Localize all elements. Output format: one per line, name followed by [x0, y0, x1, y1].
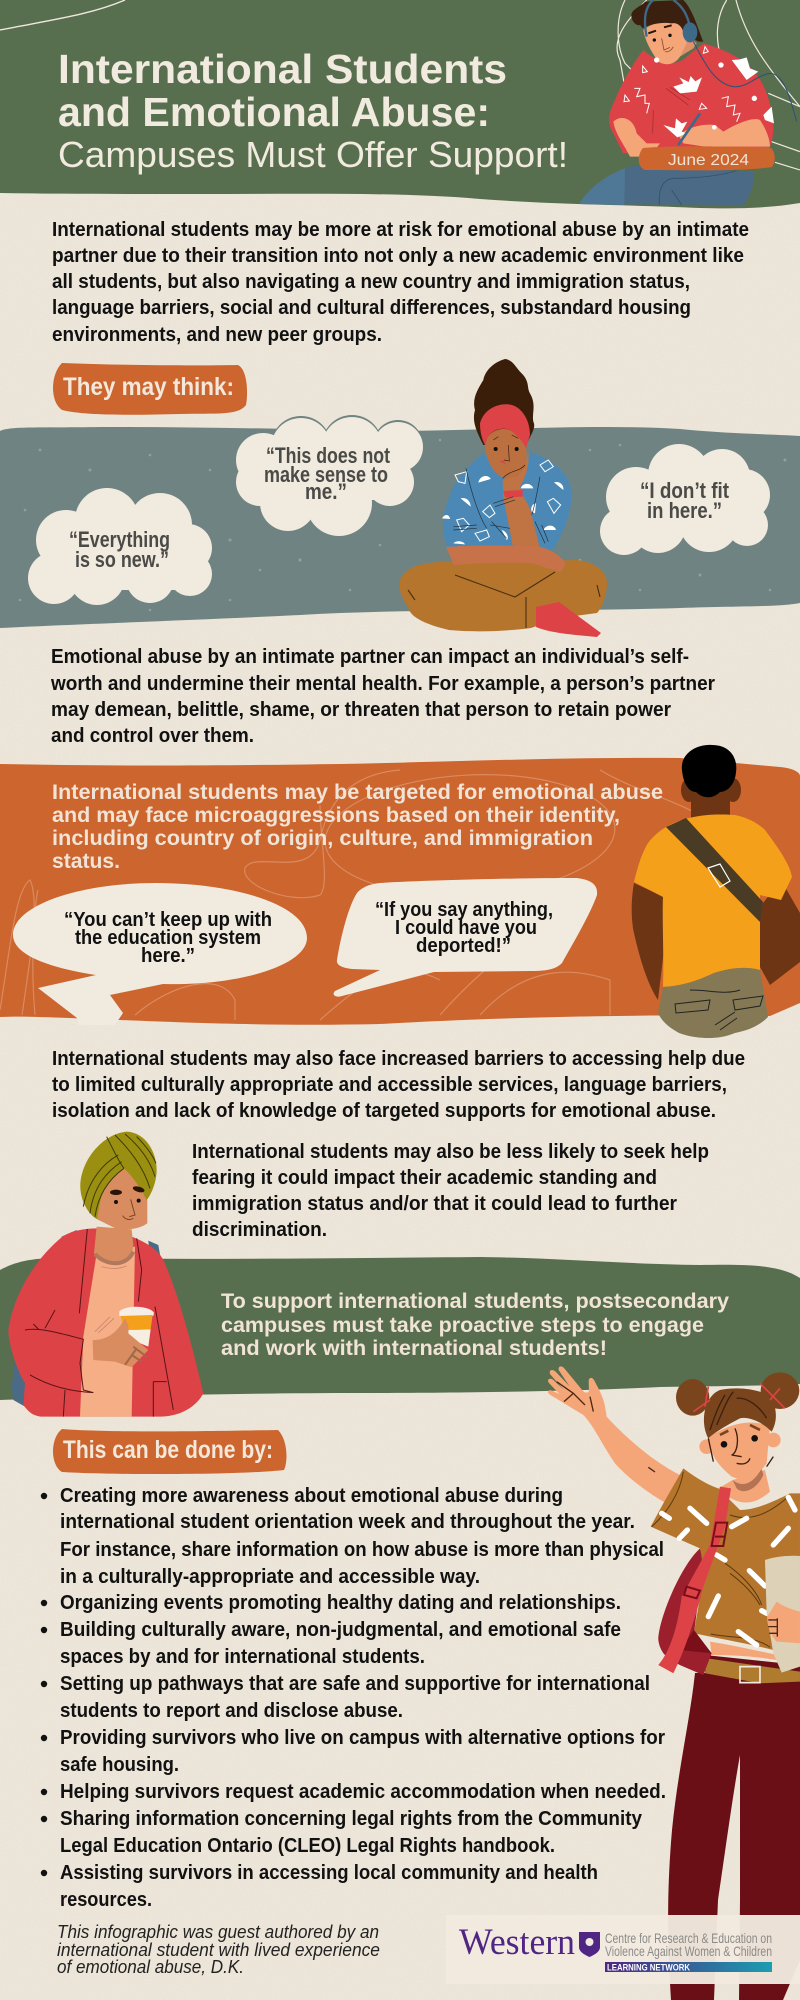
title: and Emotional Abuse:	[58, 89, 490, 135]
list of recommendations: Setting up pathways that are safe and supportive for international	[60, 1673, 650, 1695]
authorship note: of emotional abuse, D.K.	[57, 1957, 244, 1977]
panel: green support band	[0, 1257, 800, 1400]
list of recommendations	[41, 1485, 666, 1911]
authorship note	[57, 1922, 380, 1977]
body text: impact of abuse: Emotional abuse by an intimate partner can impact an individual’s self-	[51, 646, 689, 668]
intro paragraph: all students, but also navigating a new country and immigration status,	[52, 271, 690, 293]
body text: less likely to seek help: International students may also be less likely to seek help	[192, 1141, 709, 1163]
logo panel	[446, 1915, 800, 1984]
title: Campuses Must Offer Support!	[58, 134, 568, 175]
body text: impact of abuse: may demean, belittle, shame, or threaten that person to retain power	[51, 699, 671, 721]
body text: barriers to help: isolation and lack of knowledge of targeted supports for emotional abuse.	[52, 1100, 716, 1122]
green panel text: campuses must take proactive steps to engage	[221, 1314, 704, 1337]
thought bubble: I don't fit in here	[600, 444, 770, 555]
panel: grey thoughts band	[0, 427, 800, 628]
speech bubble: keep up	[13, 883, 307, 1025]
body text: less likely to seek help: immigration status and/or that it could lead to further	[192, 1193, 677, 1215]
intro paragraph: environments, and new peer groups.	[52, 324, 382, 346]
title: International Students	[58, 46, 507, 92]
heading: this can be done by: This can be done by:	[63, 1436, 273, 1464]
heading: they may think: They may think:	[63, 373, 234, 401]
intro paragraph: partner due to their transition into not only a new academic environment like	[52, 245, 744, 267]
thought bubble: this does not make sense: make sense to	[264, 462, 388, 487]
list of recommendations: international student orientation week and throughout the year.	[60, 1511, 635, 1533]
list of recommendations: For instance, share information on how abuse is more than physical	[60, 1539, 664, 1561]
body text: impact of abuse: and control over them.	[51, 725, 254, 747]
orange panel text: International students may be targeted for emotional abuse	[52, 781, 663, 804]
thought bubble: this does not make sense: “This does not	[266, 443, 391, 468]
body text: barriers to help	[52, 1048, 745, 1122]
green panel text: and work with international students!	[221, 1337, 607, 1360]
body text: impact of abuse: worth and undermine their mental health. For example, a person’s partner	[50, 673, 715, 695]
list of recommendations: Assisting survivors in accessing local community and health	[60, 1862, 598, 1884]
green panel text: To support international students, postsecondary	[221, 1290, 729, 1313]
thought bubble: everything is so new: “Everything	[69, 527, 170, 552]
thought bubble: I don't fit in here: in here.”	[647, 498, 722, 523]
body text: barriers to help: International students may also face increased barriers to accessing help due	[52, 1048, 745, 1070]
speech bubble: deported: I could have you	[395, 916, 537, 939]
intro paragraph	[52, 219, 749, 346]
thought bubble: everything is so new: is so new.”	[75, 547, 169, 572]
list of recommendations: students to report and disclose abuse.	[60, 1700, 403, 1722]
body text: less likely to seek help: discrimination.	[192, 1219, 327, 1241]
illustration: student seen from behind	[632, 745, 800, 1038]
thought bubble: this does not make sense: me.”	[305, 479, 347, 504]
orange panel text: and may face microaggressions based on their identity,	[52, 804, 620, 827]
orange panel text: status.	[52, 850, 120, 873]
date pill	[639, 146, 775, 170]
heading: they may think	[53, 363, 247, 415]
list of recommendations: Organizing events promoting healthy dating and relationships.	[60, 1592, 621, 1614]
list of recommendations: Helping survivors request academic accommodation when needed.	[60, 1781, 666, 1803]
list of recommendations: resources.	[60, 1889, 152, 1911]
intro paragraph: International students may be more at risk for emotional abuse by an intimate	[52, 219, 749, 241]
illustration: student waving with book	[548, 1366, 800, 2000]
speech bubble: deported: deported!”	[416, 934, 511, 957]
speech bubble: keep up: “You can’t keep up with	[64, 908, 272, 931]
panel: orange microaggressions band	[0, 758, 800, 1025]
date pill: June 2024	[668, 152, 749, 169]
thought bubble: this does not make sense	[236, 415, 423, 536]
body text: barriers to help: to limited culturally appropriate and accessible services, language barriers,	[52, 1074, 727, 1096]
list of recommendations: Legal Education Ontario (CLEO) Legal Rights handbook.	[60, 1835, 555, 1857]
intro paragraph: language barriers, social and cultural differences, substandard housing	[52, 297, 691, 319]
illustration: student with turban and coffee	[8, 1132, 203, 1417]
illustration: seated student thinking	[399, 359, 607, 637]
body text: less likely to seek help	[192, 1141, 709, 1241]
speech bubble: keep up: the education system	[75, 926, 261, 949]
logo panel: Western	[459, 1922, 575, 1963]
authorship note: international student with lived experience	[57, 1940, 380, 1960]
list of recommendations: Providing survivors who live on campus with alternative options for	[60, 1727, 665, 1749]
heading: this can be done by	[53, 1429, 286, 1474]
body text: less likely to seek help: fearing it could impact their academic standing and	[192, 1167, 657, 1189]
thought bubble: I don't fit in here: “I don’t fit	[640, 478, 730, 503]
logo panel: LEARNING NETWORK	[607, 1962, 690, 1974]
list of recommendations: Creating more awareness about emotional abuse during	[60, 1485, 563, 1507]
body text: impact of abuse	[50, 646, 715, 747]
list of recommendations: Building culturally aware, non-judgmental, and emotional safe	[60, 1619, 621, 1641]
title	[58, 46, 568, 175]
authorship note: This infographic was guest authored by an	[57, 1922, 379, 1942]
header banner	[0, 0, 800, 208]
list of recommendations: safe housing.	[60, 1754, 179, 1776]
speech bubble: deported	[334, 878, 597, 997]
list of recommendations: Sharing information concerning legal rights from the Community	[60, 1808, 643, 1830]
list of recommendations: spaces by and for international students.	[60, 1646, 425, 1668]
orange panel text	[52, 781, 663, 873]
list of recommendations: in a culturally-appropriate and accessible way.	[60, 1566, 480, 1588]
green panel text	[221, 1290, 729, 1360]
thought bubble: everything is so new	[28, 488, 212, 605]
orange panel text: including country of origin, culture, and immigration	[52, 827, 593, 850]
speech bubble: deported: “If you say anything,	[375, 898, 553, 921]
speech bubble: keep up: here.”	[141, 944, 195, 967]
illustration: student with headphones	[579, 0, 800, 205]
